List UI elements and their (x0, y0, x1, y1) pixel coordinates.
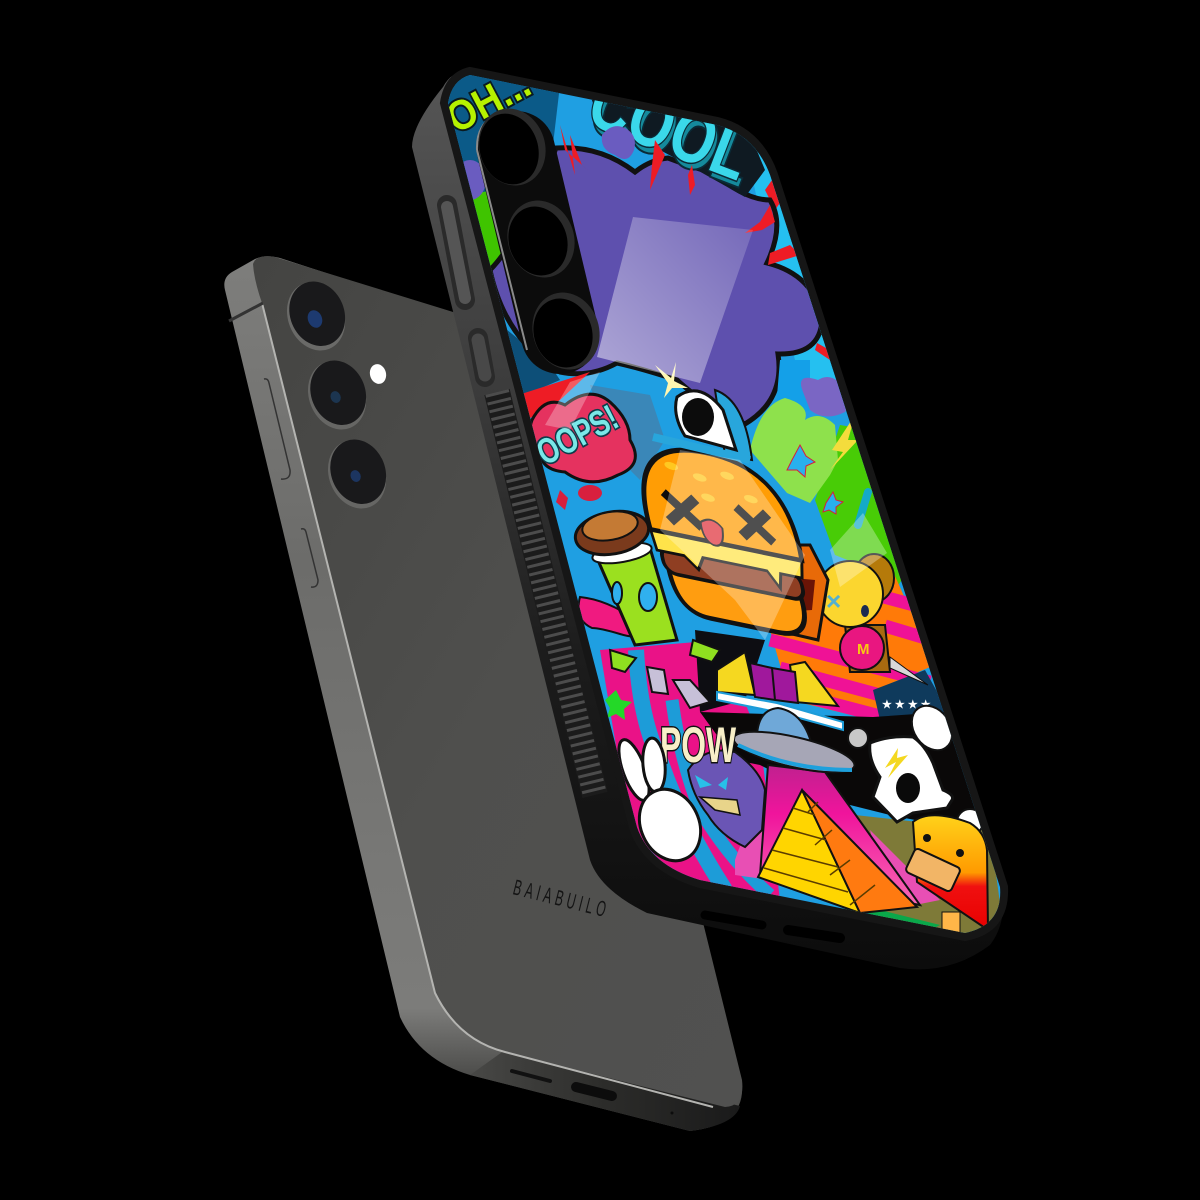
red bolts top (560, 125, 800, 265)
red panel left (524, 372, 590, 418)
blue swirl band 1 (636, 650, 725, 890)
green ground patch (860, 905, 940, 945)
ufo beam (760, 765, 920, 905)
artwork base (448, 75, 1000, 933)
blue swirl band 2 (672, 700, 770, 895)
popsicle eyes (923, 834, 931, 842)
power button (478, 338, 485, 377)
port slot 2 (788, 930, 840, 938)
volume button inner (447, 207, 465, 298)
patterned glass case (412, 59, 1030, 969)
phone back panel (253, 256, 742, 1107)
cool lettering extrusion: COOL (580, 65, 764, 202)
glass reflection near oops (545, 372, 600, 430)
camera opening 3 (525, 291, 601, 375)
speaker slot (512, 1071, 550, 1081)
oops text: OOPS! (530, 396, 625, 473)
olive ground (855, 815, 1005, 940)
right x eye (736, 507, 774, 543)
oh text: OH... (438, 59, 538, 142)
bear x eye: × (826, 586, 841, 616)
side button outline (264, 379, 290, 479)
camera opening 2 ring (498, 192, 584, 286)
island rim (477, 115, 527, 350)
left x eye (663, 492, 702, 528)
skull bolt (885, 748, 908, 778)
cup left eye (612, 582, 622, 604)
bandage (905, 848, 961, 892)
cool lettering shadow (590, 95, 765, 197)
teal panel left (508, 330, 560, 394)
camera opening 1 ring (469, 100, 555, 194)
cup lid (572, 506, 652, 560)
glass reflection over burger (660, 450, 805, 640)
ribbed grip ridges (497, 392, 595, 795)
sneaker soles (717, 692, 843, 730)
popsicle stick (942, 912, 960, 934)
white blob behind popsicle (957, 809, 983, 835)
microphone dots (670, 1112, 674, 1114)
fist (628, 779, 712, 871)
dotted blue patch right (776, 360, 810, 411)
volume button (447, 205, 465, 300)
skull ear (903, 698, 961, 758)
burger cheese (650, 529, 809, 594)
stars: ★ ★ ★ ★ (882, 699, 931, 711)
blue star two (823, 492, 843, 514)
camera opening 3 ring (523, 284, 609, 378)
monster teeth (700, 797, 740, 815)
camera lens 2 (298, 352, 377, 438)
dark teal corner (448, 75, 559, 198)
camera island (469, 100, 609, 378)
exclamation mark (858, 492, 868, 525)
purple monster (688, 750, 765, 847)
oops bubble (530, 394, 635, 482)
cool lettering: COOL (578, 59, 762, 196)
port slot 1 (705, 915, 762, 925)
bear eye (861, 605, 869, 617)
power button inner (478, 340, 485, 375)
phone bottom edge (470, 1050, 740, 1131)
cup right eye (639, 583, 657, 611)
blue ray top right (744, 138, 846, 411)
phone frame side (224, 256, 742, 1131)
pink stripes (770, 596, 932, 716)
hat skull icon (682, 398, 714, 436)
skull left ear (848, 728, 868, 748)
burger back panel (775, 545, 828, 640)
purple puff right (801, 377, 849, 417)
pink puff left of pyramid (735, 810, 770, 880)
case body (412, 71, 1003, 969)
bright green panel (815, 425, 905, 590)
main purple cloud (490, 148, 822, 424)
brick lines (764, 802, 875, 905)
bear body (840, 626, 884, 670)
bear head (817, 561, 883, 627)
flash (368, 362, 388, 386)
monster eyes (695, 775, 728, 790)
popsicle right eye (956, 849, 964, 857)
cup rim (591, 539, 653, 567)
camera opening 1 (470, 106, 548, 192)
blue star on green (787, 445, 815, 477)
ribbed grip base (497, 392, 595, 795)
large sneakers (717, 652, 838, 706)
grey phone, back view (224, 256, 742, 1131)
hat dome (676, 391, 736, 450)
case inner bezel (446, 73, 1002, 935)
ufo saucer (730, 723, 858, 781)
burger dark fill (780, 577, 815, 612)
small sneakers (647, 667, 710, 708)
bear sword (890, 657, 928, 685)
pyramid shaded face (802, 790, 917, 913)
burger top bun (629, 437, 802, 561)
pink puff right of pyramid (870, 830, 940, 910)
burger (629, 437, 820, 641)
lower left pink field (600, 640, 780, 900)
ufo dome (757, 708, 813, 750)
purple high tops (750, 663, 798, 703)
pyramid brick face (758, 790, 860, 913)
mini ufo doodle (578, 485, 602, 501)
frame highlight line (262, 303, 713, 1107)
camera lens 1 (277, 273, 356, 359)
peace hand (613, 736, 712, 871)
camera lens 3 (318, 431, 397, 517)
cup lid top (580, 507, 640, 545)
light green cloud (750, 398, 838, 503)
dark spot behind shoes (695, 630, 765, 712)
zombie tongue (578, 596, 630, 638)
red mini star (556, 490, 568, 510)
skull eye (896, 773, 920, 803)
index finger (613, 736, 655, 804)
tongue (699, 518, 727, 548)
green star (605, 690, 632, 720)
right side orange field (770, 575, 930, 716)
small purple puff top (602, 126, 635, 159)
popsicle (913, 815, 988, 930)
island body (516, 150, 560, 335)
sesame seeds (663, 459, 760, 512)
lime panel left (472, 192, 500, 287)
skull (870, 737, 953, 822)
camera opening 2 (500, 199, 576, 283)
frame seam (229, 303, 263, 321)
hat sparkle (655, 362, 688, 398)
bear legs (845, 625, 890, 672)
zombie cup (597, 548, 677, 645)
pow text: POW (660, 717, 737, 773)
lightning bolt (830, 422, 856, 470)
brand mark: BAIABUILO (511, 875, 612, 923)
cup green hands (610, 640, 720, 672)
ufo stripe (738, 745, 852, 770)
charging port (576, 1087, 612, 1096)
middle finger (641, 737, 667, 793)
burger patty (660, 545, 805, 601)
bear letter: M (857, 641, 870, 658)
product scene (224, 67, 1008, 1131)
hat dome blue (715, 390, 752, 460)
purple puff left (463, 160, 485, 200)
hat brim (653, 437, 750, 460)
red band top right (765, 180, 835, 360)
second side button outline (301, 529, 318, 587)
glass reflection on green (830, 513, 887, 587)
burger lower bun (669, 570, 811, 639)
bear ear (854, 554, 894, 602)
glass reflection upper (597, 217, 753, 383)
navy star block (873, 670, 944, 717)
teal dotted panel (590, 385, 665, 480)
comic artwork (448, 75, 1000, 933)
black night scene (700, 712, 990, 835)
